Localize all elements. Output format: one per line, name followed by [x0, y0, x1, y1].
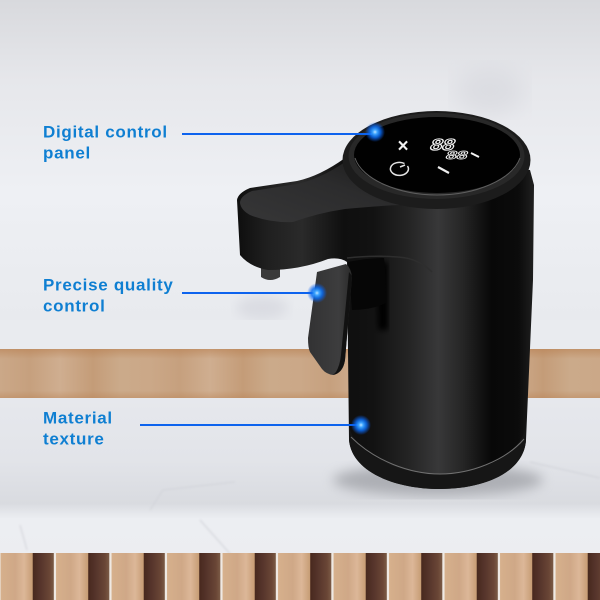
- callout: material texture: [43, 408, 371, 448]
- bracket behind lever: [348, 258, 388, 330]
- callout: precise quality control: [43, 276, 327, 316]
- spout arm top face: [240, 162, 400, 222]
- callout: digital control panel: [43, 122, 385, 162]
- nozzle: [261, 266, 280, 280]
- background: wood band: [0, 349, 600, 398]
- callout: precise quality control: control: [43, 296, 106, 316]
- lever edge: [333, 272, 352, 375]
- screen symbol: minus: [438, 167, 449, 173]
- digital readout: [428, 136, 470, 162]
- spout arm underside contour: [347, 256, 432, 272]
- background: blurred wall: [0, 0, 600, 350]
- callout: digital control panel: Digital control: [43, 122, 168, 142]
- background: wooden slats: [0, 553, 600, 600]
- digital readout: 88: [444, 149, 470, 162]
- base ring: [349, 424, 526, 489]
- callout: digital control panel: panel: [43, 144, 91, 162]
- screen symbol: close: ×: [397, 136, 409, 157]
- screen icon: power: [390, 162, 408, 175]
- callout: material texture: Material: [43, 408, 113, 428]
- dispenser silhouette: spout arm and body: [237, 158, 534, 489]
- touch screen: [354, 117, 520, 195]
- digital readout: 88: [428, 136, 458, 154]
- lever: [308, 264, 352, 375]
- background: marble counter: [0, 398, 600, 565]
- cap outer ring: [342, 111, 530, 209]
- dispenser product: [237, 111, 534, 489]
- callout: material texture: texture: [43, 430, 105, 448]
- callout: precise quality control: Precise quality: [43, 276, 174, 294]
